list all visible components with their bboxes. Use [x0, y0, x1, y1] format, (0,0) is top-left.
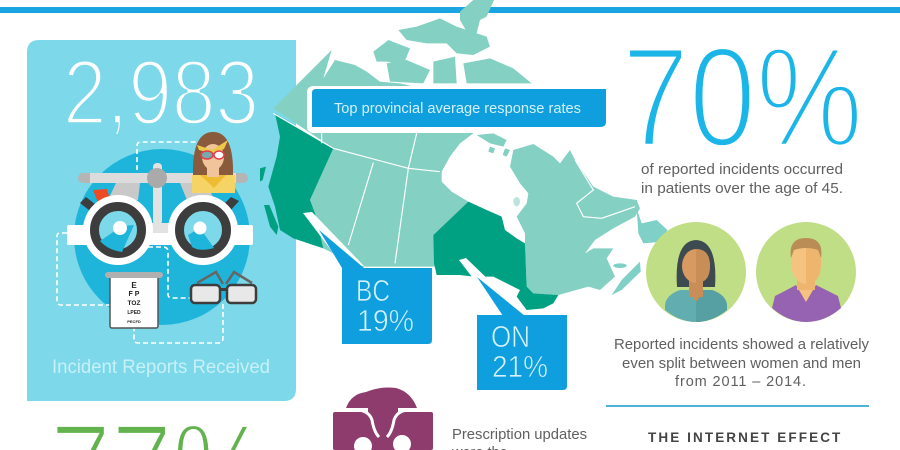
panel caption: Incident Reports Received — [52, 356, 270, 378]
map of Canada — [260, 0, 667, 310]
eye chart: TOZ — [128, 300, 140, 307]
icon: woman — [646, 222, 746, 322]
callout: ON 21%: 21% — [492, 349, 548, 384]
map: British Columbia highlighted — [260, 113, 333, 248]
top rule — [0, 7, 900, 13]
spectacles — [191, 272, 256, 303]
map: province borders — [273, 113, 635, 263]
map: mainland — [273, 50, 473, 267]
text: gender split: even split between women and men — [622, 356, 861, 372]
eye chart: LPED — [127, 310, 141, 316]
text: age of patients — [641, 162, 843, 197]
eye chart: E — [131, 281, 137, 290]
map: Ontario highlighted — [433, 202, 558, 310]
callout: BC 19% — [303, 212, 432, 344]
text: prescription updates — [451, 427, 587, 450]
callout: ON 21%: ON — [491, 319, 530, 354]
map: Atlantic provinces — [612, 208, 667, 295]
text: age of patients: in patients over the age of 45. — [641, 181, 843, 197]
eye chart: PECFD — [127, 319, 141, 324]
map: Quebec and Labrador — [510, 144, 640, 295]
eye chart: F P — [129, 291, 140, 298]
text: age of patients: of reported incidents occurred — [641, 162, 843, 178]
heading: the internet effect: THE INTERNET EFFECT — [648, 430, 842, 445]
big number: 2,983: 2,983 — [63, 42, 259, 144]
eye chart — [105, 272, 163, 328]
icon: eye exam purple — [333, 388, 433, 450]
woman with glasses — [192, 132, 235, 193]
stat: 70%: 70% — [622, 18, 863, 177]
map: arctic islands — [373, 0, 532, 157]
map: James Bay islands — [513, 197, 520, 206]
panel: incident reports — [27, 40, 296, 401]
icon: man — [756, 222, 856, 322]
backdrop circle — [74, 149, 250, 325]
text: prescription updates: Prescription updates — [452, 427, 587, 443]
callout: BC 19%: BC — [356, 273, 390, 308]
callout: ON 21% — [459, 258, 567, 390]
banner: top provincial rates: Top provincial average response rates — [334, 100, 581, 117]
text: gender split — [614, 337, 870, 390]
phoropter — [67, 163, 253, 265]
text: gender split: from 2011 – 2014. — [675, 374, 807, 390]
illustration: eye exam — [57, 132, 256, 343]
dashed connectors — [57, 142, 223, 343]
text: gender split: Reported incidents showed a relatively — [614, 337, 870, 353]
banner: top provincial rates — [307, 86, 607, 133]
callout: BC 19%: 19% — [357, 303, 414, 338]
